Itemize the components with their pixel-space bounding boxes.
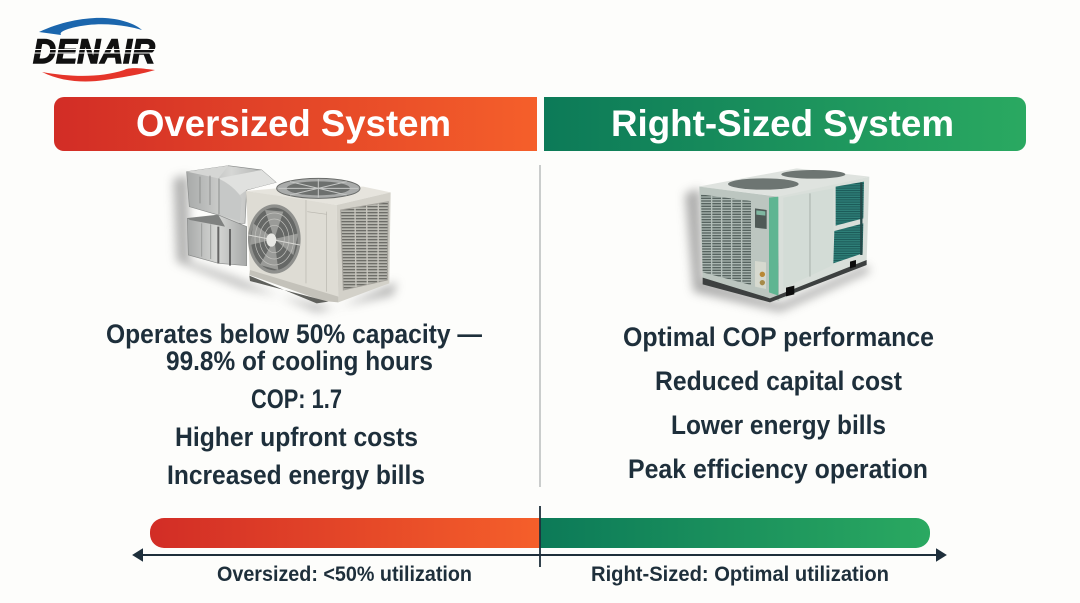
unit top	[698, 168, 869, 197]
logo wordmark stripe	[30, 50, 158, 53]
unit shadow	[173, 175, 397, 312]
point: COP: COP: 1.7	[251, 384, 342, 414]
louver grille	[341, 202, 388, 290]
scale bar: right-sized	[540, 518, 930, 548]
green corner strip	[769, 197, 778, 296]
scale arrow	[134, 550, 945, 560]
ductwork	[187, 166, 276, 266]
scale bar: oversized	[150, 518, 540, 548]
image: right-sized packaged unit	[685, 168, 870, 312]
text block: oversized points	[106, 319, 482, 490]
logo blue swoosh	[39, 18, 142, 35]
side fan	[248, 204, 301, 274]
unit base	[703, 260, 867, 302]
header: Right-Sized System: Right-Sized System	[611, 103, 954, 144]
logo wordmark: DENAIR	[33, 33, 155, 71]
point: energy bills: Lower energy bills	[671, 410, 886, 440]
unit body	[246, 178, 391, 303]
control panel	[755, 208, 767, 229]
door panels	[783, 188, 833, 288]
point: energy bills: Increased energy bills	[167, 460, 425, 490]
left louver	[701, 194, 751, 285]
text block: right-sized points	[623, 322, 934, 484]
point: peak efficiency: Peak efficiency operation	[628, 454, 928, 484]
scale label: right-sized: Right-Sized: Optimal utilization	[591, 563, 889, 586]
logo red swoosh	[42, 68, 155, 81]
image: oversized rooftop unit with ductwork	[173, 166, 397, 312]
scale label: oversized: Oversized: <50% utilization	[217, 563, 472, 586]
top fan	[277, 178, 360, 198]
point: capacity: Operates below 50% capacity —	[106, 319, 482, 349]
unit shadow	[685, 188, 870, 312]
utilization scale	[134, 506, 945, 586]
header: Oversized System: Oversized System	[136, 103, 451, 144]
scale midpoint tick	[539, 506, 541, 567]
point: capital cost: Reduced capital cost	[655, 366, 902, 396]
header: Right-Sized System	[544, 97, 1026, 151]
top fans	[728, 178, 799, 190]
valves box	[755, 261, 766, 289]
unit left face	[699, 187, 779, 301]
point: upfront costs: Higher upfront costs	[175, 422, 418, 452]
logo: DENAIR	[30, 18, 158, 81]
right louvers	[836, 182, 864, 226]
unit right face	[778, 177, 869, 301]
point: cooling hours: 99.8% of cooling hours	[166, 346, 433, 376]
header: Oversized System	[54, 97, 537, 151]
point: optimal COP: Optimal COP performance	[623, 322, 934, 352]
center divider	[539, 165, 541, 487]
